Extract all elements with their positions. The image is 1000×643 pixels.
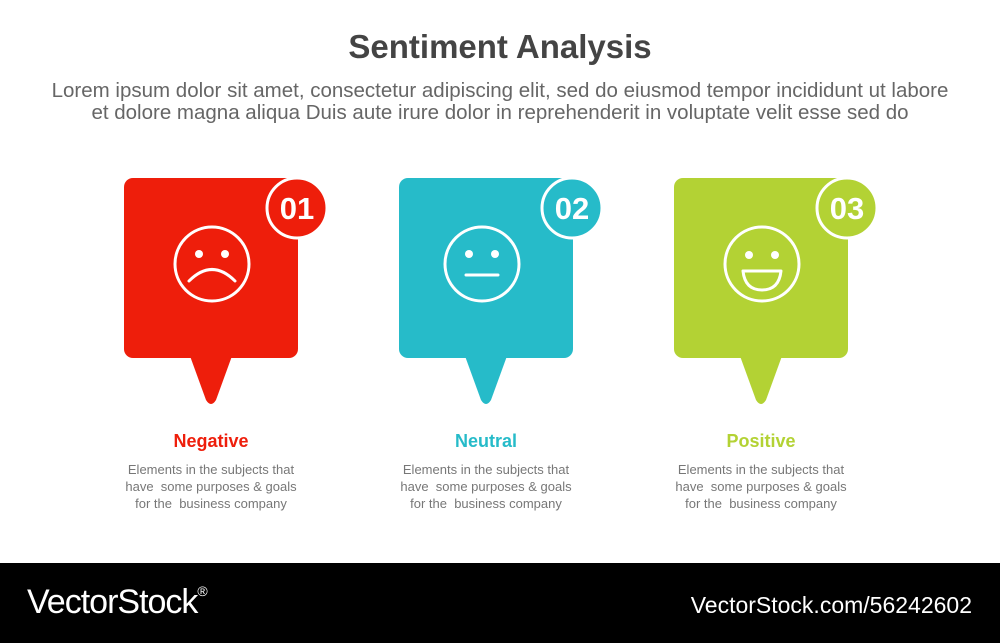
card 1: negative — [124, 178, 327, 404]
subtitle: Lorem ipsum dolor sit amet, consectetur adipiscing elit, sed do eiusmod tempor incididunt ut labore — [52, 79, 948, 102]
desc: positive: for the business company — [685, 496, 837, 511]
card 3: positive: 03 — [830, 191, 864, 226]
desc: neutral: for the business company — [410, 496, 562, 511]
label: positive: Positive — [726, 431, 796, 451]
footer bar — [0, 563, 1000, 643]
desc: negative: for the business company — [135, 496, 287, 511]
desc: negative: Elements in the subjects that — [128, 462, 294, 477]
label: neutral: Neutral — [455, 431, 517, 451]
desc: positive: Elements in the subjects that — [678, 462, 844, 477]
desc: neutral: have some purposes & goals — [400, 479, 572, 494]
card 2: neutral: 02 — [555, 191, 589, 226]
desc: neutral: Elements in the subjects that — [403, 462, 569, 477]
footer id: VectorStock.com/56242602 — [691, 592, 972, 618]
desc: negative: have some purposes & goals — [125, 479, 297, 494]
card 1: negative: 01 — [280, 191, 314, 226]
subtitle: et dolore magna aliqua Duis aute irure dolor in reprehenderit in voluptate velit esse sed do — [91, 101, 909, 124]
card 3: positive — [674, 178, 877, 404]
subtitle — [52, 79, 948, 124]
label: negative: Negative — [173, 431, 249, 451]
footer logo: VectorStock® — [27, 583, 207, 621]
title: Sentiment Analysis — [348, 28, 652, 65]
desc: positive: have some purposes & goals — [675, 479, 847, 494]
desc: positive — [675, 462, 847, 511]
card 2: neutral — [399, 178, 602, 404]
desc: negative — [125, 462, 297, 511]
desc: neutral — [400, 462, 572, 511]
